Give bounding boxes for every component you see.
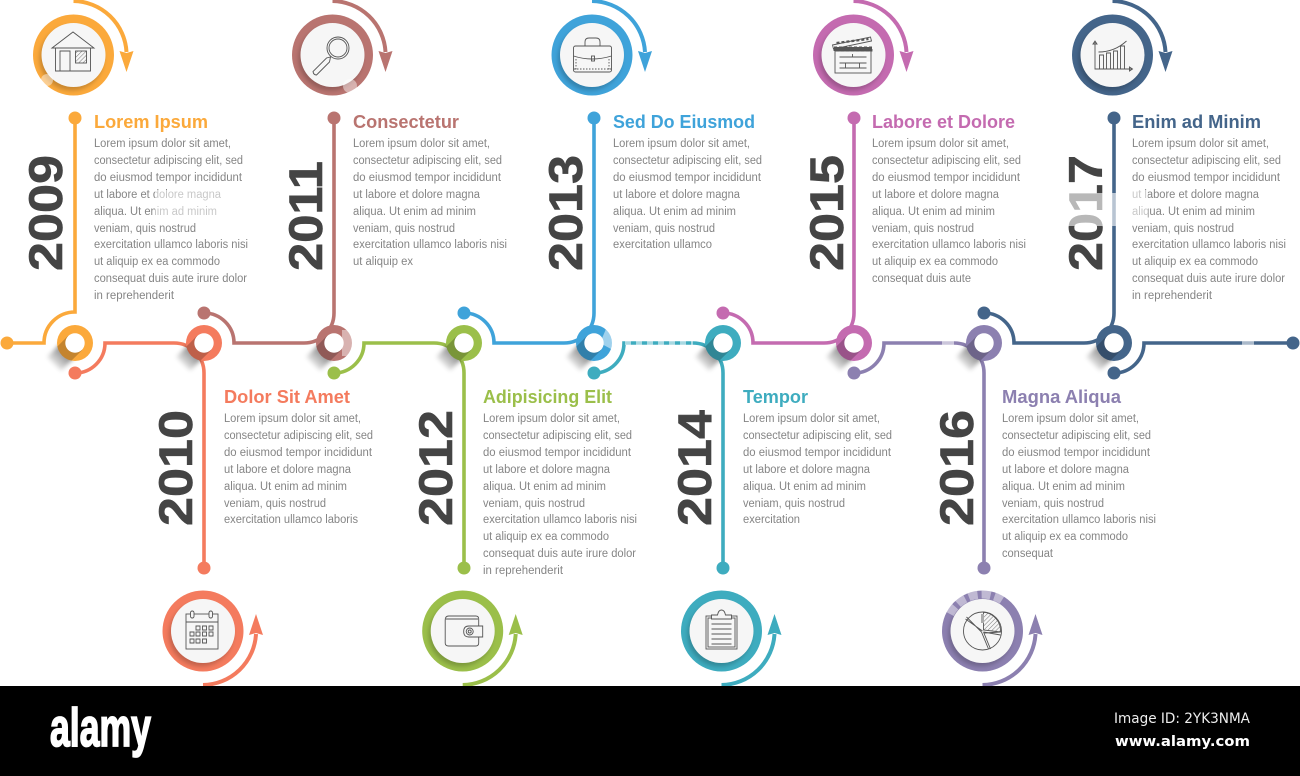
text block: Enim ad Minim <box>1132 111 1286 302</box>
body: ut aliquip ex ea commodo <box>94 256 220 268</box>
body <box>872 138 1026 285</box>
icon badge: magnifier <box>292 1 392 96</box>
text block: Sed Do Eiusmod <box>613 111 762 251</box>
body: veniam, quis nostrud <box>743 498 845 510</box>
image id: Image ID: 2YK3NMA <box>1114 711 1250 727</box>
body: aliqua. Ut enim ad minim <box>483 481 606 493</box>
heading: Lorem Ipsum <box>94 111 208 132</box>
body: exercitation ullamco laboris nisi <box>353 239 507 251</box>
body: ut labore et dolore magna <box>353 189 481 201</box>
body: exercitation ullamco laboris <box>224 514 358 526</box>
body: aliqua. Ut enim ad minim <box>224 481 347 493</box>
icon badge: calendar <box>162 590 263 685</box>
footer bar <box>0 686 1300 776</box>
body: exercitation ullamco laboris nisi <box>94 239 248 251</box>
body: ut aliquip ex ea commodo <box>1002 531 1128 543</box>
heading: Labore et Dolore <box>872 111 1015 132</box>
body: ut labore et dolore magna <box>94 189 222 201</box>
timeline connector: 2014 <box>588 343 730 574</box>
body: exercitation ullamco laboris nisi <box>1002 514 1156 526</box>
body: do eiusmod tempor incididunt <box>353 172 502 184</box>
body: veniam, quis nostrud <box>94 223 196 235</box>
body: consequat duis aute irure dolor <box>1132 273 1285 285</box>
timeline connector: 2009 <box>0 112 82 350</box>
body <box>1132 138 1286 302</box>
body: veniam, quis nostrud <box>1132 223 1234 235</box>
timeline connector: 2011 <box>198 112 340 343</box>
body: ut labore et dolore magna <box>483 464 611 476</box>
heading: Dolor Sit Amet <box>224 386 350 407</box>
node 2017 <box>1084 325 1132 373</box>
body: do eiusmod tempor incididunt <box>613 172 762 184</box>
website: www.alamy.com <box>1115 734 1250 750</box>
body: consequat duis aute irure dolor <box>483 548 636 560</box>
body: Lorem ipsum dolor sit amet, <box>1132 138 1269 150</box>
heading: Tempor <box>743 386 808 407</box>
body: consectetur adipiscing elit, sed <box>483 430 632 442</box>
body: Lorem ipsum dolor sit amet, <box>94 138 231 150</box>
body: exercitation <box>743 514 800 526</box>
node 2015 <box>824 325 872 373</box>
icon badge: pie chart <box>942 590 1042 685</box>
body: consectetur adipiscing elit, sed <box>872 155 1021 167</box>
body: veniam, quis nostrud <box>613 223 715 235</box>
heading: Enim ad Minim <box>1132 111 1261 132</box>
body: exercitation ullamco laboris nisi <box>872 239 1026 251</box>
body: consectetur adipiscing elit, sed <box>613 155 762 167</box>
icon badge: wallet <box>422 590 523 685</box>
body: consectetur adipiscing elit, sed <box>224 430 373 442</box>
body: in reprehenderit <box>1132 290 1213 302</box>
body: ut labore et dolore magna <box>743 464 871 476</box>
body: aliqua. Ut enim ad minim <box>353 206 476 218</box>
text block: Dolor Sit Amet <box>224 386 373 526</box>
year: 2010: 2010 <box>149 410 202 526</box>
body: do eiusmod tempor incididunt <box>94 172 243 184</box>
timeline connector: 2010 <box>68 343 210 574</box>
node 2014 <box>693 325 741 373</box>
body: veniam, quis nostrud <box>224 498 326 510</box>
faded watermark traces <box>41 74 1254 614</box>
body: consequat <box>1002 548 1054 560</box>
body: aliqua. Ut enim ad minim <box>1132 206 1255 218</box>
footer logo: alamy <box>50 698 151 758</box>
body: veniam, quis nostrud <box>872 223 974 235</box>
body: do eiusmod tempor incididunt <box>1132 172 1281 184</box>
body: veniam, quis nostrud <box>483 498 585 510</box>
node 2010 <box>174 325 222 373</box>
node 2011 <box>304 325 352 373</box>
body: ut labore et dolore magna <box>613 189 741 201</box>
body: Lorem ipsum dolor sit amet, <box>224 413 361 425</box>
year: 2011: 2011 <box>279 161 332 271</box>
body: aliqua. Ut enim ad minim <box>872 206 995 218</box>
text block: Labore et Dolore <box>872 111 1026 285</box>
body <box>224 413 373 526</box>
body: do eiusmod tempor incididunt <box>224 447 373 459</box>
year: 2009: 2009 <box>19 155 72 271</box>
year: 2014: 2014 <box>668 410 721 526</box>
timeline connector: end <box>1108 336 1300 380</box>
body: do eiusmod tempor incididunt <box>483 447 632 459</box>
timeline connector: 2012 <box>328 343 470 574</box>
heading: Sed Do Eiusmod <box>613 111 755 132</box>
body: do eiusmod tempor incididunt <box>743 447 892 459</box>
text block: Magna Aliqua <box>1002 386 1156 560</box>
timeline connector: 2015 <box>716 112 860 343</box>
node 2009 <box>45 325 93 373</box>
year: 2016: 2016 <box>930 410 983 526</box>
timeline connector: 2017 <box>978 112 1120 343</box>
body: exercitation ullamco laboris nisi <box>483 514 637 526</box>
body: exercitation ullamco <box>613 239 712 251</box>
body: Lorem ipsum dolor sit amet, <box>872 138 1009 150</box>
body: in reprehenderit <box>94 290 175 302</box>
body <box>1002 413 1156 560</box>
body: consectetur adipiscing elit, sed <box>1132 155 1281 167</box>
node 2012 <box>434 325 482 373</box>
body <box>353 138 507 268</box>
body: ut labore et dolore magna <box>1002 464 1130 476</box>
body: consectetur adipiscing elit, sed <box>94 155 243 167</box>
icon badge: briefcase <box>552 1 652 96</box>
body: ut aliquip ex ea commodo <box>483 531 609 543</box>
heading: Adipisicing Elit <box>483 386 612 407</box>
year: 2012: 2012 <box>409 410 462 526</box>
body: Lorem ipsum dolor sit amet, <box>613 138 750 150</box>
body: ut aliquip ex <box>353 256 413 268</box>
heading: Magna Aliqua <box>1002 386 1122 407</box>
body: Lorem ipsum dolor sit amet, <box>483 413 620 425</box>
timeline connector: 2016 <box>848 343 990 574</box>
text block: Adipisicing Elit <box>483 386 637 577</box>
node 2013 <box>564 325 612 373</box>
icon badge: house <box>33 1 134 96</box>
body: do eiusmod tempor incididunt <box>1002 447 1151 459</box>
body <box>743 413 892 526</box>
body: Lorem ipsum dolor sit amet, <box>743 413 880 425</box>
body: ut labore et dolore magna <box>224 464 352 476</box>
body: ut labore et dolore magna <box>1132 189 1260 201</box>
body: consectetur adipiscing elit, sed <box>353 155 502 167</box>
body: consequat duis aute <box>872 273 971 285</box>
body: do eiusmod tempor incididunt <box>872 172 1021 184</box>
body: veniam, quis nostrud <box>353 223 455 235</box>
timeline connector: 2013 <box>458 112 600 343</box>
icon badge: clipboard <box>681 590 782 685</box>
icon badge: clapperboard <box>813 1 914 96</box>
body: ut aliquip ex ea commodo <box>872 256 998 268</box>
body: aliqua. Ut enim ad minim <box>94 206 217 218</box>
body: consequat duis aute irure dolor <box>94 273 247 285</box>
body: in reprehenderit <box>483 565 564 577</box>
heading: Consectetur <box>353 111 459 132</box>
body: aliqua. Ut enim ad minim <box>1002 481 1125 493</box>
body: veniam, quis nostrud <box>1002 498 1104 510</box>
body: consectetur adipiscing elit, sed <box>1002 430 1151 442</box>
body: consectetur adipiscing elit, sed <box>743 430 892 442</box>
body: aliqua. Ut enim ad minim <box>613 206 736 218</box>
text block: Consectetur <box>353 111 507 268</box>
body: Lorem ipsum dolor sit amet, <box>1002 413 1139 425</box>
year: 2017: 2017 <box>1059 155 1112 271</box>
year: 2013: 2013 <box>539 155 592 271</box>
body <box>483 413 637 577</box>
node 2016 <box>954 325 1002 373</box>
body <box>613 138 762 251</box>
text block: Tempor <box>743 386 892 526</box>
year: 2015: 2015 <box>800 155 853 271</box>
text block: Lorem Ipsum <box>94 111 248 302</box>
body: ut labore et dolore magna <box>872 189 1000 201</box>
body: exercitation ullamco laboris nisi <box>1132 239 1286 251</box>
body: ut aliquip ex ea commodo <box>1132 256 1258 268</box>
body: Lorem ipsum dolor sit amet, <box>353 138 490 150</box>
icon badge: growth chart <box>1072 1 1172 96</box>
body: aliqua. Ut enim ad minim <box>743 481 866 493</box>
body <box>94 138 248 302</box>
